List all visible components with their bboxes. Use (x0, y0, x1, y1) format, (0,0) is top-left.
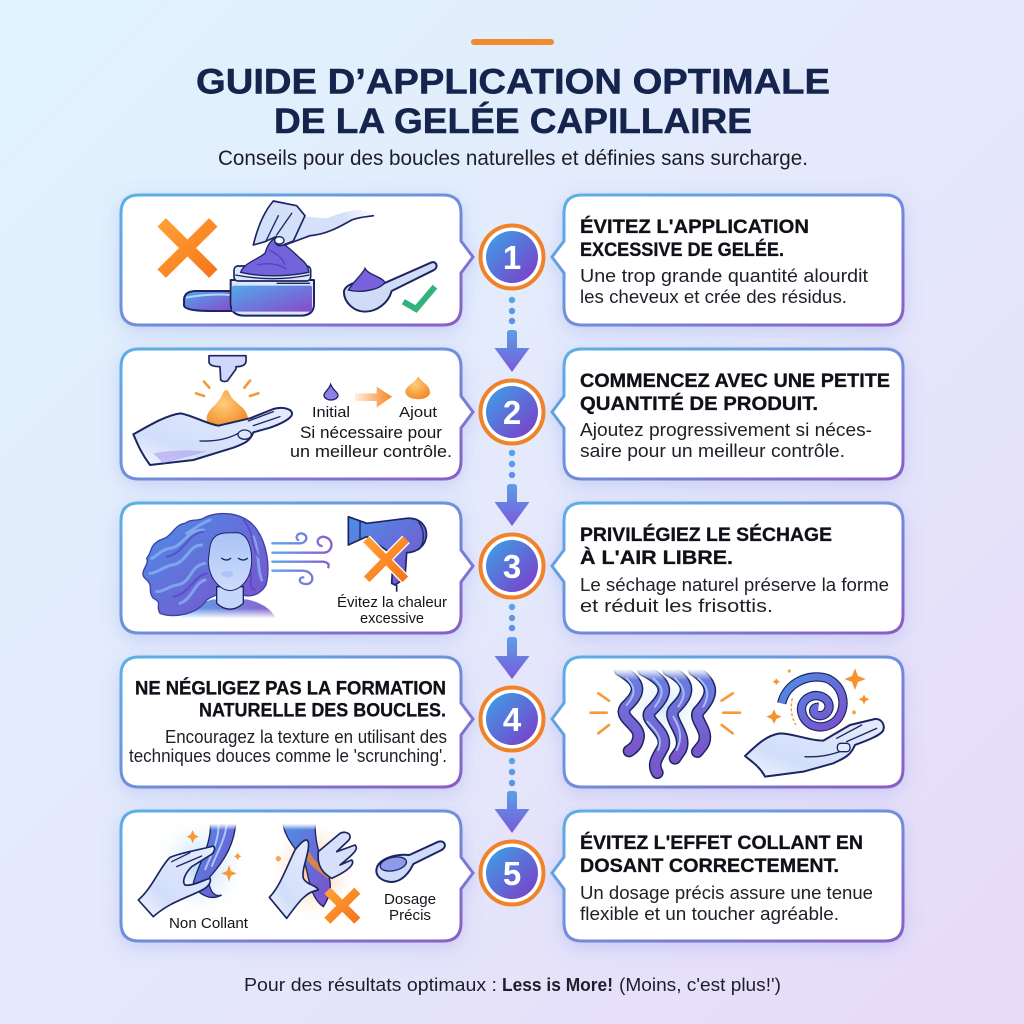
icon: jar with excess gel and scoop (162, 201, 437, 316)
text: step 3 description (580, 574, 889, 616)
footer takeaway: Less is More! (502, 975, 613, 995)
heading: natural curl formation: NATURELLE DES BOUCLES. (199, 700, 446, 722)
heading: step 5 (580, 831, 863, 877)
heading: step 2: QUANTITÉ DE PRODUIT. (580, 392, 818, 415)
icon: woman with air-dried curls and crossed hair dryer (143, 514, 426, 627)
panel: step 2 illustration (121, 349, 473, 479)
heading: step 1 (580, 215, 809, 261)
text: initial and addition captions: Ajout (399, 405, 437, 421)
heading: step 3: PRIVILÉGIEZ LE SÉCHAGE (580, 523, 832, 546)
text: step 5 captions (169, 892, 436, 932)
text: heat warning caption: Évitez la chaleur (337, 594, 447, 611)
heading: step 5: ÉVITEZ L'EFFET COLLANT EN (580, 831, 863, 854)
heading: natural curl formation (135, 676, 446, 722)
text: step 5 description (580, 882, 873, 924)
text: step 2 description (580, 419, 872, 461)
text: step 5 description: Un dosage précis assure une tenue (580, 882, 873, 903)
text: heat warning caption: excessive (360, 611, 424, 627)
badge: step 5: 5 (503, 855, 521, 892)
badge: step 5 (480, 842, 544, 904)
panel: step 5 text (552, 811, 903, 941)
panel: step 3 text (552, 503, 903, 633)
heading: natural curl formation: NE NÉGLIGEZ PAS LA FORMATION (135, 676, 446, 700)
badge: step 1 (480, 226, 544, 288)
heading: step 3 (580, 523, 832, 569)
text: step 5 captions: Dosage (384, 892, 436, 908)
badge: step 2: 2 (503, 394, 521, 431)
accent bar (471, 39, 554, 45)
text: step 1 description: les cheveux et crée des résidus. (580, 286, 847, 307)
panel: step 3 illustration (121, 503, 473, 633)
panel: step 5 illustration (121, 811, 473, 941)
footer takeaway (244, 975, 781, 995)
footer takeaway: (Moins, c'est plus!') (619, 975, 781, 995)
title: GUIDE D’APPLICATION OPTIMALE (196, 62, 830, 102)
badge: step 3 (480, 534, 544, 598)
title (196, 62, 830, 141)
subtitle: Conseils pour des boucles naturelles et définies sans surcharge. (218, 147, 808, 170)
text: initial and addition captions: Initial (312, 405, 350, 421)
text: step 2 description: saire pour un meilleur contrôle. (580, 440, 845, 461)
title: DE LA GELÉE CAPILLAIRE (274, 101, 752, 141)
heading: step 1: EXCESSIVE DE GELÉE. (580, 238, 784, 261)
text: step 5 description: flexible et un toucher agréable. (580, 903, 839, 924)
badge: step 4: 4 (503, 701, 522, 738)
panel: step 1 illustration (121, 195, 473, 325)
connector: dotted line and arrow 3 to 4 (494, 604, 530, 679)
text: heat warning caption (337, 594, 447, 627)
icon: hand with dropper and orange gel (133, 356, 430, 465)
text: step 5 captions: Précis (389, 908, 431, 924)
text: step 4 description: techniques douces comme le 'scrunching'. (129, 745, 447, 766)
icon: non sticky hair, sticky hair and dosing spoon (138, 813, 445, 923)
connector: dotted line and arrow 1 to 2 (494, 297, 530, 372)
heading: step 5: DOSANT CORRECTEMENT. (580, 855, 839, 877)
text: initial and addition captions: un meilleur contrôle. (290, 443, 452, 461)
footer takeaway: Pour des résultats optimaux : (244, 975, 497, 995)
text: initial and addition captions: Si nécessaire pour (300, 424, 443, 442)
badge: step 4 (480, 688, 544, 750)
text: step 5 captions: Non Collant (169, 916, 248, 932)
text: initial and addition captions (290, 405, 452, 461)
badge: step 2 (480, 380, 544, 444)
connector: dotted line and arrow 4 to 5 (494, 758, 530, 833)
text: step 4 description: Encouragez la texture en utilisant des (165, 726, 447, 747)
text: step 3 description: Le séchage naturel préserve la forme (580, 574, 889, 595)
text: step 4 description (129, 726, 447, 766)
panel: step 4 text (121, 657, 473, 787)
icon: defined curls and spiral above hand (591, 660, 884, 777)
panel: step 1 text (552, 195, 903, 325)
text: step 3 description: et réduit les frisottis. (580, 595, 773, 616)
heading: step 3: À L'AIR LIBRE. (580, 546, 733, 569)
panel: step 4 illustration (552, 657, 903, 787)
heading: step 2 (580, 370, 890, 415)
heading: step 1: ÉVITEZ L'APPLICATION (580, 215, 809, 238)
badge: step 1: 1 (503, 239, 521, 276)
connector: dotted line and arrow 2 to 3 (494, 450, 530, 526)
text: step 1 description (580, 265, 868, 307)
text: step 2 description: Ajoutez progressivement si néces- (580, 419, 872, 440)
text: step 1 description: Une trop grande quantité alourdit (580, 265, 868, 286)
heading: step 2: COMMENCEZ AVEC UNE PETITE (580, 370, 890, 392)
panel: step 2 text (552, 349, 903, 479)
badge: step 3: 3 (503, 548, 521, 585)
